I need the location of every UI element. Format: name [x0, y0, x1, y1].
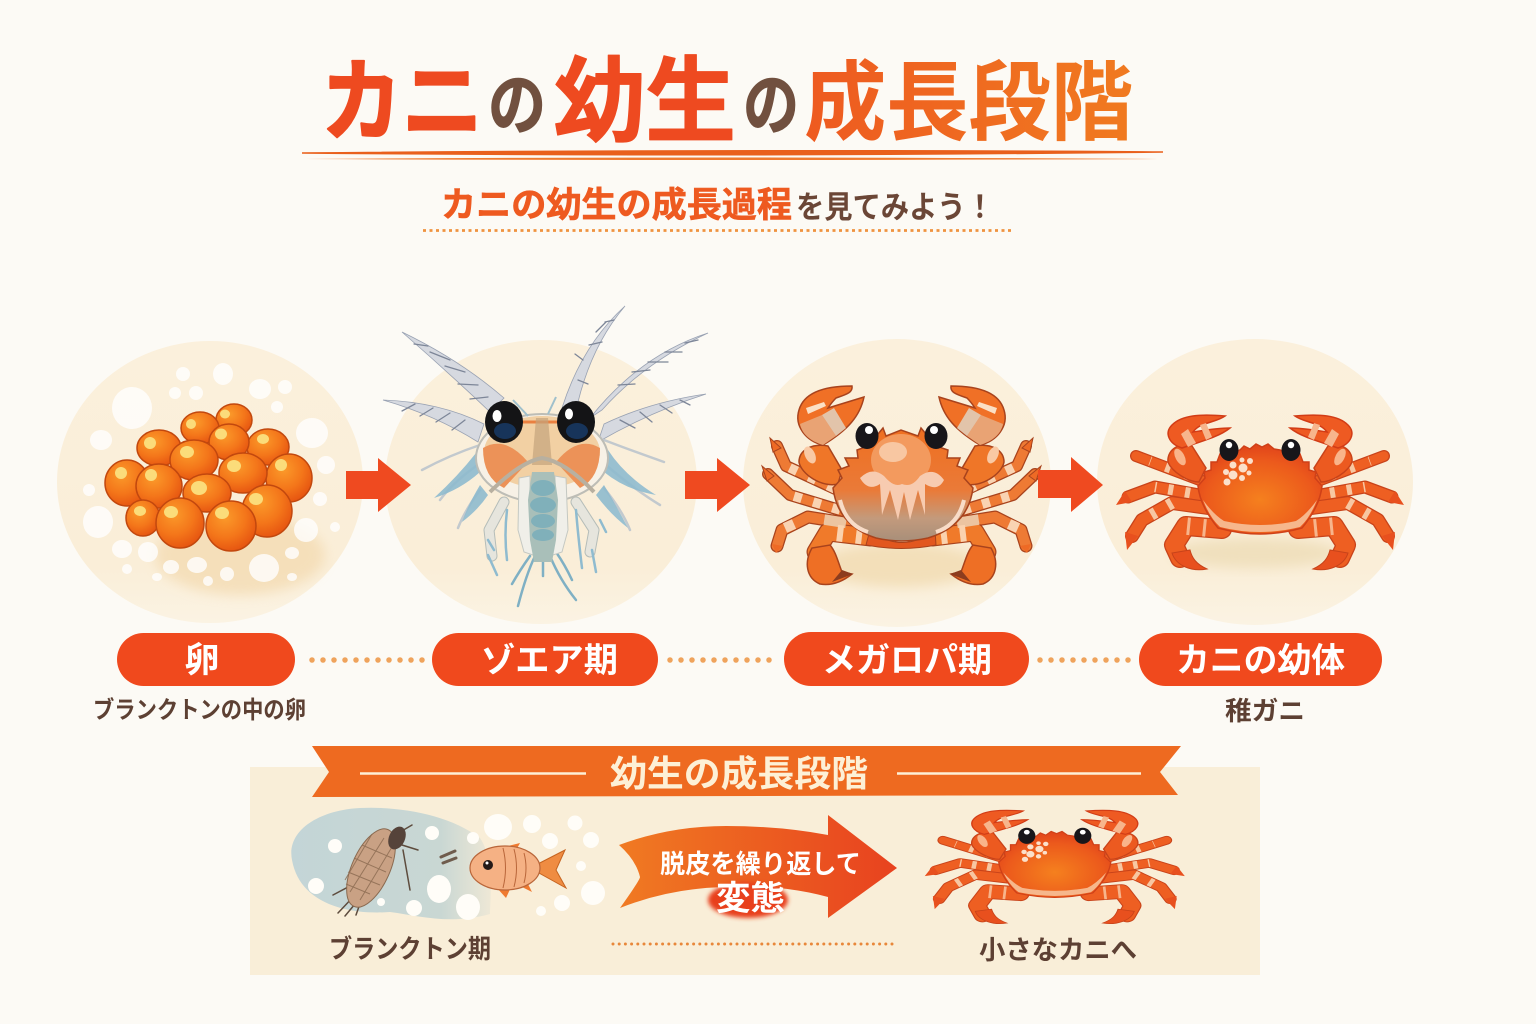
arrow: moulting repeated: 変態 [716, 880, 785, 918]
icon: zoea larva [383, 306, 708, 606]
egg highlights [115, 410, 287, 519]
tail spines [512, 552, 576, 606]
ground shadow [1170, 538, 1340, 568]
circle background [1097, 339, 1413, 625]
bubbles [83, 363, 340, 586]
carapace [476, 414, 608, 502]
bubbles [308, 814, 605, 920]
connector [312, 657, 424, 663]
stage label: juvenile: カニの幼体 [1176, 642, 1345, 680]
arrow: megalopa to juvenile [1038, 457, 1103, 512]
icon: small crab [925, 810, 1185, 924]
circle background [743, 339, 1051, 627]
panel: growth summary [250, 746, 1260, 975]
title: の [488, 68, 546, 144]
arrow: zoea to megalopa [685, 458, 750, 512]
caption: egg: ブランクトンの中の卵 [93, 696, 306, 724]
title: 成長段階 [804, 55, 1133, 152]
label: plankton period: ブランクトン期 [329, 934, 491, 964]
title: の [743, 68, 799, 144]
small marks [441, 851, 456, 863]
shell highlight [1223, 458, 1253, 486]
stage label: zoea: ゾエア期 [481, 642, 618, 680]
dotted divider [613, 942, 894, 946]
eyes [856, 423, 878, 449]
icon: juvenile crab [1116, 415, 1404, 570]
caption: juvenile: 稚ガニ [1225, 696, 1305, 726]
subtitle: カニの幼生の成長過程 [441, 186, 792, 225]
circle background [385, 340, 697, 624]
eyes [485, 401, 523, 443]
label: to small crab: 小さなカニへ [979, 935, 1137, 965]
circle background [57, 341, 363, 623]
stage label: megalopa [784, 632, 1029, 686]
ground shadow [820, 543, 980, 587]
panel: zoea stage [383, 306, 708, 624]
stage label: zoea [432, 633, 658, 686]
icon: plankton scene [291, 808, 605, 920]
title [321, 50, 1133, 154]
subtitle dotted line [423, 229, 1011, 232]
arrow: egg to zoea [346, 458, 411, 512]
body band [866, 530, 936, 548]
antennae [513, 397, 556, 416]
soft shadow [155, 515, 325, 595]
arrow: moulting repeated: 脱皮を繰り返して [660, 849, 861, 879]
title: カニ [321, 53, 483, 153]
stage label: megalopa: メガロパ期 [822, 642, 992, 680]
panel: egg stage [57, 341, 363, 623]
stage label: egg [117, 633, 295, 686]
subtitle [441, 186, 994, 225]
panel: megalopa stage [743, 339, 1051, 627]
connector [1040, 657, 1131, 663]
icon: egg cluster [105, 404, 312, 551]
connector [670, 657, 776, 663]
ribbon heading: 幼生の成長段階 [610, 753, 868, 794]
thoracic legs [488, 502, 606, 575]
stage label: juvenile [1139, 633, 1382, 686]
ribbon heading [312, 746, 1181, 797]
copepod [333, 822, 418, 916]
panel: juvenile stage [1097, 339, 1413, 625]
long spines [383, 306, 708, 442]
title underline [302, 151, 1163, 160]
stage label: egg: 卵 [184, 641, 220, 680]
carapace [1198, 444, 1322, 534]
title: 幼生 [554, 50, 736, 154]
carapace [833, 428, 973, 541]
arrow: moulting repeated [619, 815, 897, 918]
subtitle: を見てみよう！ [796, 190, 994, 225]
eyes [1220, 439, 1238, 461]
side setae [422, 440, 664, 530]
abdomen [518, 476, 568, 556]
icon: megalopa crab [762, 386, 1041, 585]
fish [470, 843, 566, 898]
